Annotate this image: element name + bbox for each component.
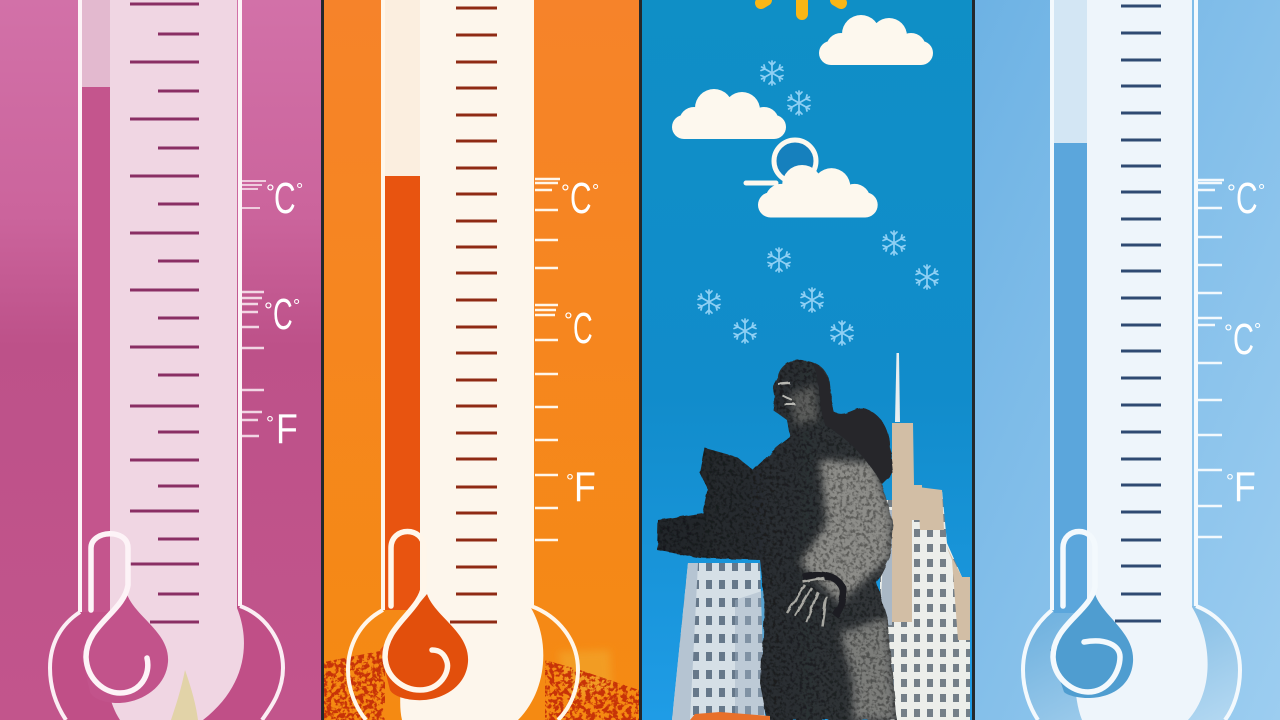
label: upper celsius	[266, 173, 303, 222]
icon: cone detail	[171, 670, 198, 720]
label: upper celsius: °	[561, 180, 570, 205]
icon: cloud top right	[819, 15, 933, 65]
label: upper celsius: °	[592, 181, 599, 201]
label: upper celsius: °	[1227, 180, 1236, 205]
label: middle celsius: °	[1224, 320, 1233, 345]
label: fahrenheit: °	[1226, 471, 1234, 493]
label: upper celsius: C	[1236, 173, 1258, 222]
scale ticks right	[242, 181, 266, 208]
icon: drop	[1050, 532, 1133, 698]
thermometer tube level	[82, 0, 110, 612]
thermometer body	[106, 0, 244, 720]
label: middle celsius: C	[273, 289, 293, 339]
thermometer bulb housing	[1023, 606, 1240, 720]
label: middle celsius: °	[1254, 320, 1261, 340]
thermometer outline	[1052, 0, 1196, 610]
thermometer outline	[80, 0, 240, 612]
thermometer bulb housing	[348, 606, 578, 720]
label: middle celsius: C	[573, 303, 593, 353]
icons: snowflakes	[698, 61, 938, 345]
scale ticks right	[1198, 180, 1224, 537]
label: middle celsius	[1224, 314, 1261, 363]
label: upper celsius: C	[274, 173, 296, 222]
thermometer body	[1075, 0, 1208, 720]
label: fahrenheit: F	[276, 406, 298, 453]
label: fahrenheit	[266, 406, 298, 453]
label: middle celsius: C	[1233, 314, 1254, 363]
label: upper celsius	[561, 173, 599, 222]
label: upper celsius: °	[1258, 181, 1265, 201]
icon: cloud centre	[758, 165, 878, 218]
thermometer outline	[383, 0, 532, 610]
icon: drop	[380, 532, 468, 700]
icon: cloud left	[672, 89, 786, 139]
statue: cuff	[803, 575, 843, 616]
label: middle celsius: °	[293, 296, 300, 316]
label: fahrenheit: F	[574, 464, 596, 511]
statue: surface grain	[650, 355, 900, 720]
tick marks	[130, 4, 199, 622]
scale ticks right	[535, 179, 560, 540]
tick marks	[1115, 6, 1161, 621]
label: middle celsius	[564, 303, 593, 353]
panel: pink thermometer	[0, 0, 321, 720]
building: left tower	[672, 563, 765, 720]
label: middle celsius: °	[264, 298, 273, 323]
panel: sky with statue	[639, 0, 975, 720]
label: upper celsius: C	[570, 173, 592, 222]
statue: hair and braid	[812, 362, 893, 484]
icon: sun rays	[761, 0, 841, 14]
panel: orange thermometer	[321, 0, 642, 720]
thermometer body	[400, 0, 543, 720]
thermometer bulb housing	[50, 606, 283, 720]
label: upper celsius	[1227, 173, 1265, 222]
label: fahrenheit: °	[566, 471, 574, 493]
label: fahrenheit: °	[266, 413, 274, 435]
flower strip	[690, 712, 770, 720]
thermometer tube level	[1054, 0, 1087, 613]
icon: drop	[80, 534, 168, 703]
icon: sun outline behind cloud	[746, 140, 816, 183]
statue: hand	[787, 578, 826, 626]
building: right tower	[880, 353, 970, 720]
label: middle celsius	[264, 289, 300, 339]
statue	[650, 355, 900, 720]
thermometer tube level	[385, 0, 420, 610]
label: upper celsius: °	[266, 180, 275, 205]
panel: blue thermometer	[975, 0, 1280, 720]
texture: city base	[324, 650, 639, 720]
statue: coat highlight	[790, 385, 897, 720]
label: upper celsius: °	[296, 180, 303, 200]
tick marks	[450, 8, 497, 622]
label: fahrenheit: F	[1234, 464, 1256, 511]
label: middle celsius: °	[564, 308, 573, 333]
statue: face	[778, 383, 795, 404]
